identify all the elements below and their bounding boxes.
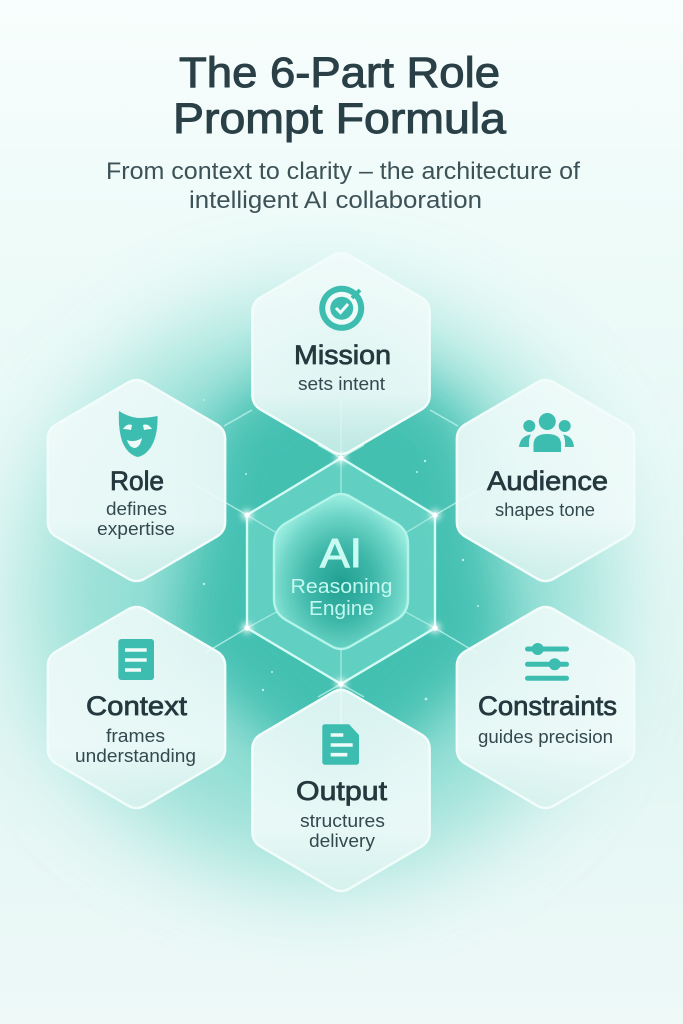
icon: document lines [118,639,154,680]
role label: Role [110,466,164,496]
icon: theatre mask [119,411,158,457]
role description: defines [106,499,167,519]
icon: target [319,286,364,331]
icon: people [519,413,574,452]
title: Prompt Formula [173,95,506,143]
title: The 6-Part Role [179,49,500,97]
mission description: sets intent [298,374,385,394]
icon: sliders [528,643,566,678]
spokes [247,458,435,684]
audience description: shapes tone [495,500,595,520]
stars [203,399,479,700]
panel: output [252,690,430,891]
central network hexagon [242,453,440,689]
panel: mission [252,253,430,454]
role description: expertise [97,519,175,539]
output description: structures [300,811,385,831]
subtitle: From context to clarity – the architecture of [106,158,580,185]
audience label: Audience [487,466,608,496]
context description: frames [106,726,165,746]
context description: understanding [75,746,196,766]
title [173,49,506,143]
panel: role [48,380,225,581]
core label: Engine [309,598,374,620]
context description [75,726,196,766]
output description [300,811,385,851]
context label: Context [86,691,188,721]
panel: AI reasoning engine core [274,494,408,649]
subtitle: intelligent AI collaboration [189,187,482,214]
constraints description: guides precision [478,727,613,747]
mission label: Mission [294,340,391,370]
constraints label: Constraints [478,691,617,721]
panel: context [48,607,225,808]
output description: delivery [309,831,375,851]
core heading: AI [320,530,362,576]
panel: audience [457,380,634,581]
output label: Output [296,776,388,806]
subtitle [106,158,580,214]
core label [290,576,392,620]
role description [97,499,175,539]
icon: output document [322,724,359,765]
panel: constraints [457,607,634,808]
teal glow behind hexagons [33,305,603,875]
glowing nodes [242,453,440,689]
connector lines and rays [190,400,492,745]
core label: Reasoning [290,576,392,598]
